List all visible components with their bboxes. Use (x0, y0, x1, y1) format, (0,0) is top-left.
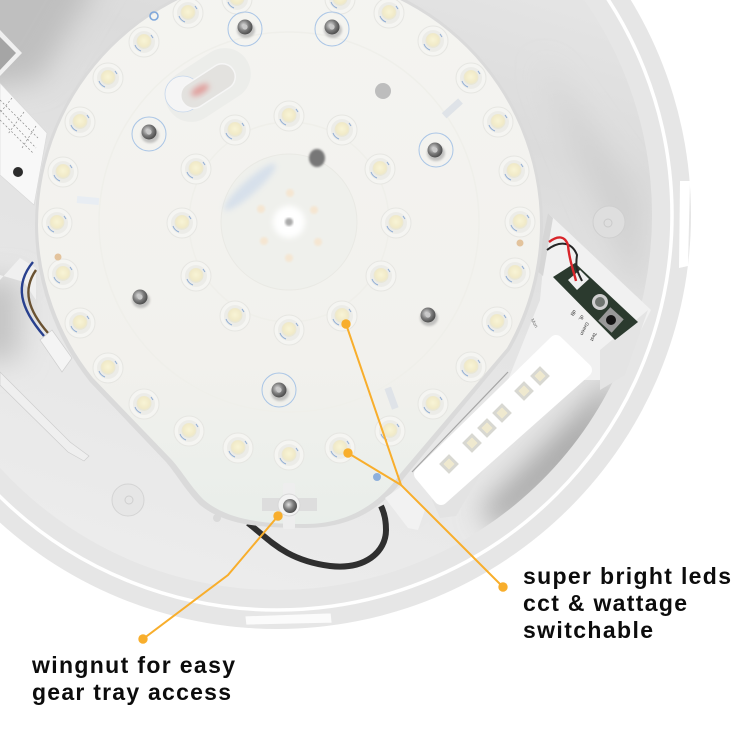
capsule component (155, 38, 261, 132)
switch labels: Green (578, 321, 590, 336)
faint concentric board lines (99, 32, 479, 412)
switch labels: dB (568, 308, 577, 317)
callout leader: wingnut (138, 511, 283, 644)
shaded basin areas (0, 0, 640, 530)
screws (132, 12, 453, 407)
inner led ring (167, 101, 411, 345)
label: wingnut: gear tray access (32, 679, 231, 705)
board details: holes and components (54, 12, 524, 481)
callout leader: super bright leds (341, 319, 508, 592)
wingnut (262, 483, 317, 529)
label: wingnut: wingnut for easy (31, 652, 235, 678)
switch labels: Mon (529, 318, 539, 329)
switch labels (529, 308, 598, 342)
black cable (248, 506, 386, 567)
light fitting body (0, 0, 691, 629)
pcb (553, 263, 638, 340)
strip leds (441, 368, 548, 472)
central hub lens (220, 149, 357, 290)
switch labels: dL (577, 314, 585, 322)
label: leds: switchable (523, 617, 653, 643)
pcb indicator (592, 294, 608, 310)
switch labels: Test (588, 331, 598, 342)
switch bracket and pcb (508, 213, 651, 390)
pcb switch button (598, 307, 624, 333)
rim clip: bottom (245, 613, 332, 625)
round mounting bumps (112, 206, 625, 522)
label: leds: super bright leds (523, 563, 731, 589)
emergency led strip (385, 342, 585, 530)
driver label table (0, 98, 38, 154)
wires (547, 244, 582, 281)
left driver box and wires (0, 30, 89, 461)
outer led ring (42, 0, 535, 470)
label: leds: cct & wattage (523, 590, 687, 616)
connector (568, 270, 589, 290)
pcb board disc (35, 0, 543, 528)
rim clip: right (679, 181, 690, 268)
